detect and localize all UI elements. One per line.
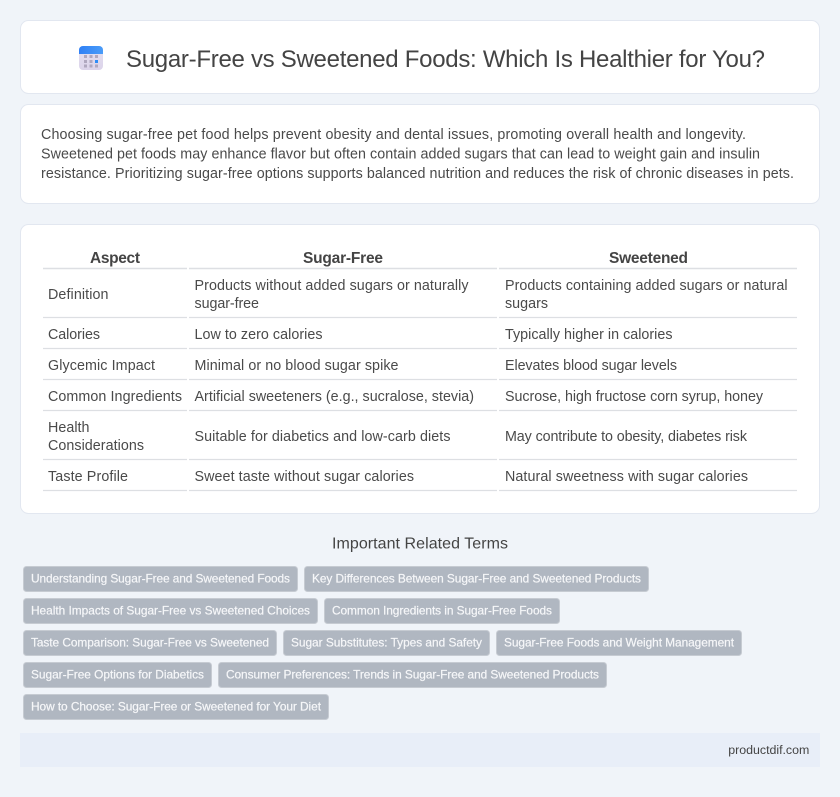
row: glycemic impact: Minimal or no blood sugar spike — [194, 358, 399, 374]
table header: Aspect — [90, 250, 140, 267]
intro text: Sweetened pet foods may enhance flavor but often contain added sugars that can lead to weight gain and insulin — [41, 146, 760, 162]
table header: Sugar-Free — [303, 250, 383, 267]
chip: Key Differences Between Sugar-Free and Sweetened Products — [312, 572, 641, 586]
row: common ingredients: Sucrose, high fructose corn syrup, honey — [505, 389, 764, 405]
row: common ingredients: Artificial sweeteners (e.g., sucralose, stevia) — [194, 389, 474, 405]
intro text: resistance. Prioritizing sugar-free options supports balanced nutrition and reduces the risk of chronic diseases in pets. — [41, 166, 794, 182]
chip — [24, 630, 276, 656]
row: calories — [48, 327, 672, 343]
title: Sugar-Free vs Sweetened Foods: Which Is Healthier for You? — [126, 46, 765, 73]
chip — [24, 598, 318, 624]
row: health considerations — [48, 420, 748, 454]
chip — [284, 630, 490, 656]
row: common ingredients — [48, 389, 764, 405]
chip: Sugar-Free Foods and Weight Management — [504, 636, 735, 650]
row: calories: Low to zero calories — [194, 327, 322, 343]
chip: Sugar Substitutes: Types and Safety — [291, 636, 482, 650]
panel: header — [20, 20, 820, 94]
chip: Consumer Preferences: Trends in Sugar-Free and Sweetened Products — [226, 668, 599, 682]
row: taste profile: Taste Profile — [48, 469, 128, 485]
table header: Sweetened — [609, 250, 688, 267]
row: definition — [48, 278, 788, 312]
row: taste profile: Natural sweetness with sugar calories — [505, 469, 748, 485]
chip — [324, 598, 560, 624]
row: taste profile — [48, 469, 748, 485]
chip: Common Ingredients in Sugar-Free Foods — [332, 604, 552, 618]
related term chips — [24, 566, 742, 720]
row: definition: Products without added sugars or naturally — [194, 278, 469, 294]
row: definition: sugar-free — [194, 296, 259, 312]
row: calories: Typically higher in calories — [505, 327, 672, 343]
row: definition: Products containing added sugars or natural — [505, 278, 788, 294]
chip — [496, 630, 742, 656]
heading: related terms: Important Related Terms — [332, 536, 508, 552]
footer: productdif.com — [728, 743, 809, 757]
row: health considerations: Health — [48, 420, 90, 436]
chip — [304, 566, 648, 592]
chip: Understanding Sugar-Free and Sweetened Foods — [31, 572, 290, 586]
row: glycemic impact — [48, 358, 677, 374]
row: definition: sugars — [505, 296, 548, 312]
row: glycemic impact: Elevates blood sugar levels — [505, 358, 677, 374]
icon: calendar — [79, 46, 103, 70]
row: calories: Calories — [48, 327, 100, 343]
row: health considerations: Considerations — [48, 438, 144, 454]
chip — [24, 662, 212, 688]
chip — [218, 662, 606, 688]
intro text: Choosing sugar-free pet food helps prevent obesity and dental issues, promoting overall health and longevity. — [41, 127, 746, 143]
intro text — [41, 127, 794, 182]
chip — [24, 566, 298, 592]
chip: Taste Comparison: Sugar-Free vs Sweetened — [31, 636, 269, 650]
row: common ingredients: Common Ingredients — [48, 389, 182, 405]
row: definition: Definition — [48, 287, 109, 303]
chip: How to Choose: Sugar-Free or Sweetened for Your Diet — [31, 700, 322, 714]
footer — [20, 733, 820, 767]
row: health considerations: May contribute to obesity, diabetes risk — [505, 429, 748, 445]
row: taste profile: Sweet taste without sugar calories — [194, 469, 414, 485]
chip: Health Impacts of Sugar-Free vs Sweetened Choices — [31, 604, 310, 618]
row: glycemic impact: Glycemic Impact — [48, 358, 155, 374]
panel: comparison table — [20, 224, 820, 514]
chip — [24, 694, 328, 720]
row: health considerations: Suitable for diabetics and low-carb diets — [194, 429, 450, 445]
chip: Sugar-Free Options for Diabetics — [31, 668, 204, 682]
table header — [90, 250, 688, 267]
panel: intro — [20, 104, 820, 204]
